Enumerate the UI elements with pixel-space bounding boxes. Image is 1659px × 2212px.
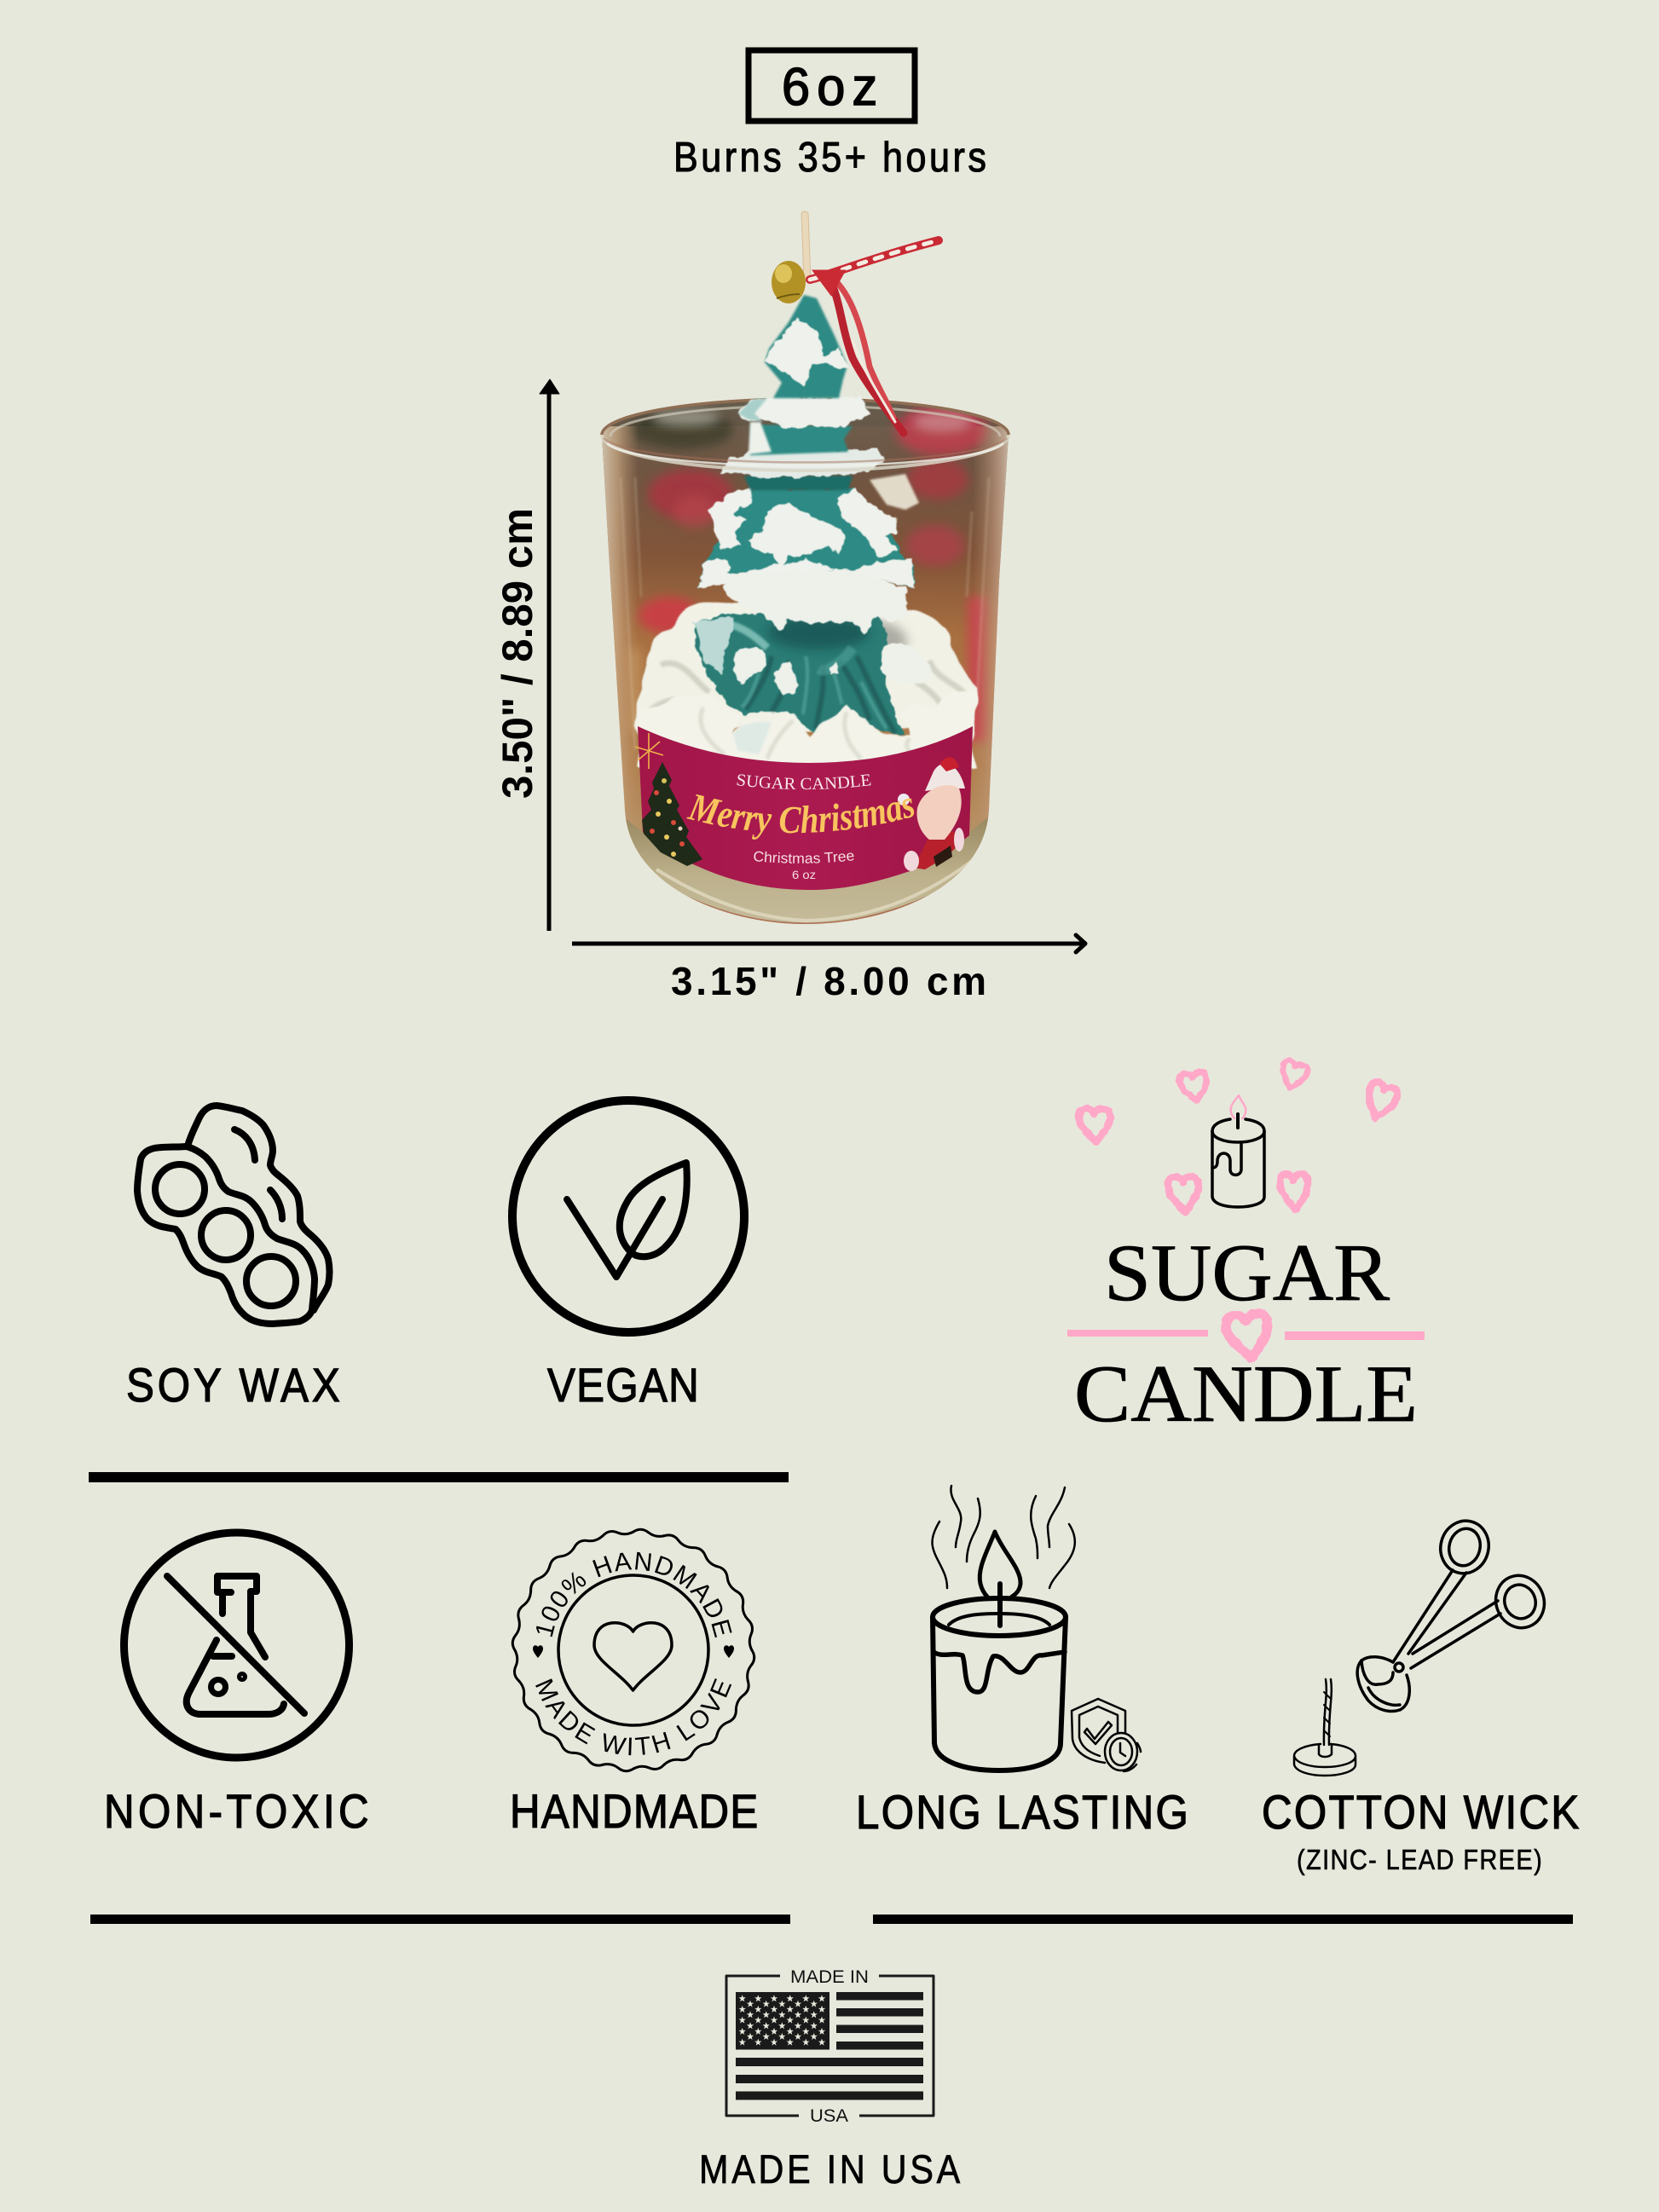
icon: vegan leaf check xyxy=(512,1100,744,1332)
label: made in USA: MADE IN USA xyxy=(699,2148,961,2192)
lower tree tier xyxy=(692,614,904,736)
seal bottom text xyxy=(533,1675,734,1755)
jingle bell xyxy=(772,261,806,303)
seal inner circle xyxy=(558,1575,708,1725)
seal heart xyxy=(594,1623,672,1690)
product photo: candle jar with wax tree xyxy=(600,211,1010,924)
icon: USA flag badge xyxy=(726,1967,934,2126)
label tree xyxy=(642,762,702,866)
icon: shield and clock xyxy=(1072,1699,1141,1771)
label on jar: SUGAR CANDLE xyxy=(737,774,871,789)
divider xyxy=(90,1915,790,1924)
width dimension text: 3.15" / 8.00 cm xyxy=(671,959,986,1003)
pale snow at tree foot xyxy=(733,722,772,754)
label: zinc lead free: (ZINC- LEAD FREE) xyxy=(1297,1844,1542,1875)
seal bullets xyxy=(533,1645,734,1658)
white cap xyxy=(765,319,847,386)
burn time text: Burns 35+ hours xyxy=(673,133,986,181)
big snow band xyxy=(722,569,908,635)
flame xyxy=(980,1532,1020,1597)
smoke xyxy=(933,1486,1075,1588)
flag canton xyxy=(736,1992,830,2049)
jar interior reflections xyxy=(597,405,1014,929)
brand logo: Sugar Candle xyxy=(1067,1060,1425,1439)
snow band behind rim xyxy=(720,450,884,477)
glass jar body xyxy=(602,399,1009,924)
icon: handmade seal: MADE WITH LOVE xyxy=(535,1678,731,1756)
icon: long lasting candle xyxy=(933,1486,1075,1770)
label on jar: Merry Christmas xyxy=(686,794,914,840)
front frosting peaks xyxy=(638,690,978,767)
label text: Merry Christmas xyxy=(687,815,919,833)
twine xyxy=(810,240,939,433)
badge bottom text: USA xyxy=(810,2106,848,2126)
icon: soy wax xyxy=(137,1106,329,1324)
icon: handmade seal xyxy=(512,1528,755,1773)
frosting shading xyxy=(648,621,968,725)
icon: logo candle xyxy=(1212,1095,1264,1207)
badge top text: MADE IN xyxy=(790,1967,869,1987)
size badge: 6oz: 6oz xyxy=(782,57,877,116)
seal top text xyxy=(552,1570,714,1636)
label text: brand xyxy=(736,785,872,789)
wick xyxy=(997,1584,1003,1626)
height arrow xyxy=(540,379,559,931)
piped frosting ridges xyxy=(701,707,912,759)
label: long lasting: LONG LASTING xyxy=(856,1786,1188,1839)
label: soy wax: SOY WAX xyxy=(126,1359,340,1412)
logo divider left xyxy=(1067,1330,1208,1337)
divider xyxy=(89,1472,789,1482)
tree boughs shading xyxy=(708,615,895,733)
icon: pink hearts xyxy=(1078,1060,1400,1360)
mid tier snow xyxy=(697,486,915,588)
trimmer xyxy=(1357,1516,1552,1712)
body xyxy=(933,1617,1066,1770)
logo divider right xyxy=(1285,1331,1425,1340)
height dimension text: 3.50" / 8.89 cm xyxy=(494,508,541,799)
frosting mound xyxy=(638,600,978,730)
label: handmade: HANDMADE xyxy=(510,1785,758,1839)
size badge: 6oz xyxy=(749,50,915,121)
label star xyxy=(635,733,663,769)
wick base xyxy=(1294,1744,1356,1776)
label: vegan: VEGAN xyxy=(547,1359,699,1412)
label text: size: 6 oz xyxy=(792,868,816,881)
logo word: SUGAR: SUGAR xyxy=(1104,1227,1390,1318)
label: cotton wick: COTTON WICK xyxy=(1262,1786,1579,1839)
tree neck xyxy=(744,476,853,490)
glass rim front xyxy=(602,435,1009,471)
wooden wick xyxy=(801,211,811,281)
icon: wick trimmer and wick xyxy=(1294,1516,1552,1776)
pale snow patch left xyxy=(692,615,733,673)
icon: non-toxic flask xyxy=(124,1533,350,1758)
width arrow xyxy=(572,935,1085,952)
drips xyxy=(934,1652,1065,1692)
top snow tier xyxy=(738,396,871,428)
label text: scent xyxy=(753,860,855,863)
seal wavy edge xyxy=(509,1526,758,1775)
flag stripes xyxy=(736,1992,923,2100)
badge frame xyxy=(726,1976,934,2116)
upper teal tier xyxy=(750,424,853,455)
snow clumps on lower tier xyxy=(732,643,931,695)
glass base xyxy=(626,817,989,924)
label on jar xyxy=(634,726,973,890)
wick xyxy=(1324,1679,1332,1745)
logo word: CANDLE: CANDLE xyxy=(1074,1349,1418,1439)
divider xyxy=(873,1915,1573,1924)
rim xyxy=(933,1598,1066,1636)
label santa xyxy=(898,757,965,871)
label on jar: Christmas Tree xyxy=(754,851,854,863)
label: non-toxic: NON-TOXIC xyxy=(104,1785,369,1839)
mid tree tier xyxy=(697,488,915,588)
tree top cone xyxy=(765,295,847,398)
icon: handmade seal: 100% HANDMADE xyxy=(536,1551,731,1638)
